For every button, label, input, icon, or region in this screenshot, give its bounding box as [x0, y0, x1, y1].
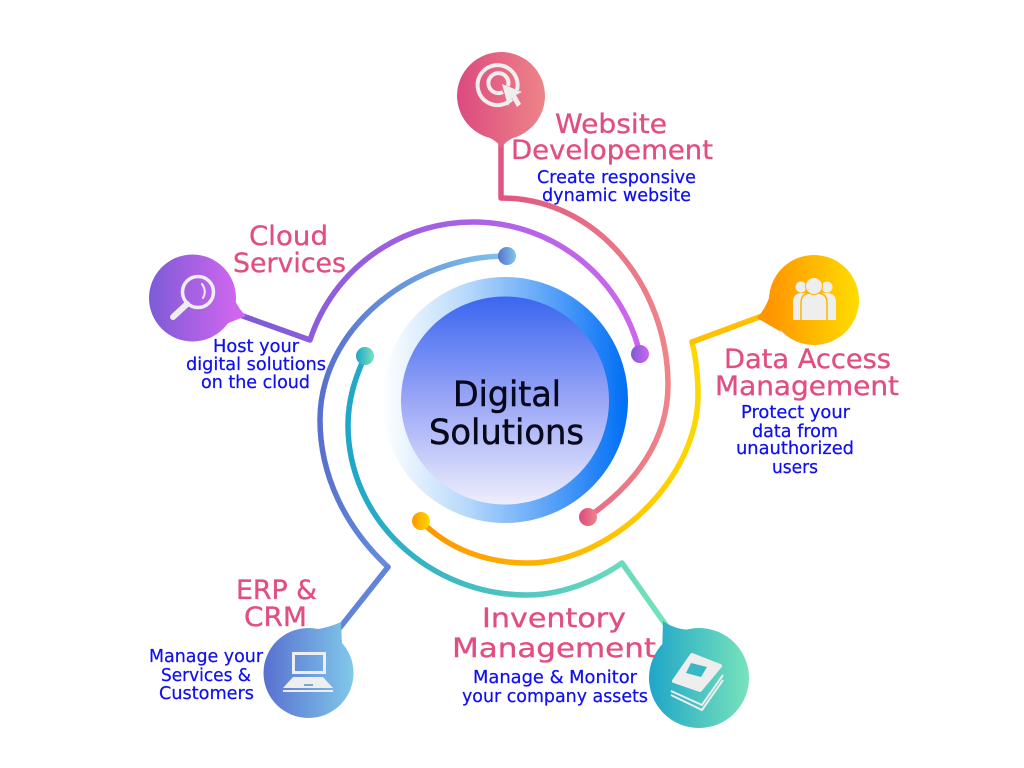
- node: Cloud Services: [149, 254, 246, 342]
- heading: Management: [452, 633, 656, 664]
- spiral connector: ERP & CRM: [320, 247, 516, 630]
- description: Services &: [161, 665, 251, 686]
- description: dynamic website: [542, 185, 691, 206]
- node: Website Development: [457, 52, 545, 148]
- description: Manage & Monitor: [473, 667, 638, 688]
- central hub: Digital Solutions: [382, 277, 628, 523]
- label: Data Access Management: [715, 344, 899, 478]
- icon: laptop: [283, 654, 333, 692]
- node disc with pointer: [649, 628, 749, 728]
- node: Inventory Management: [649, 621, 749, 728]
- label: ERP & CRM: [149, 575, 317, 704]
- description: unauthorized: [736, 438, 854, 459]
- spiral connector: Website Development: [501, 130, 668, 526]
- icon: target with cursor: [478, 65, 522, 107]
- description: your company assets: [462, 686, 648, 707]
- heading: ERP &: [236, 575, 317, 606]
- label: Inventory Management: [452, 603, 656, 707]
- node disc with pointer: [769, 255, 859, 345]
- heading: Management: [715, 371, 899, 402]
- heading: Website: [555, 109, 667, 140]
- hub inner disc: [401, 296, 609, 504]
- hub title: Solutions: [429, 413, 584, 453]
- heading: Data Access: [724, 344, 891, 375]
- description: on the cloud: [201, 372, 310, 393]
- spiral connector: Cloud Services: [240, 222, 649, 363]
- heading: Cloud: [249, 221, 328, 252]
- label: Cloud Services: [186, 221, 346, 393]
- node: Data Access Management: [757, 255, 859, 345]
- node disc with pointer: [457, 52, 545, 148]
- description: digital solutions: [186, 354, 326, 375]
- heading: Inventory: [482, 603, 626, 634]
- label: Website Development: [511, 109, 713, 206]
- node disc with pointer: [264, 628, 354, 718]
- description: data from: [752, 421, 838, 442]
- heading: Services: [233, 248, 346, 279]
- node: ERP & CRM: [264, 622, 354, 718]
- description: Protect your: [741, 402, 851, 423]
- icon: stack of books: [671, 655, 723, 710]
- hub title: Digital: [453, 375, 561, 415]
- hub outer gradient ring: [382, 277, 628, 523]
- icon: people group: [793, 278, 836, 321]
- spiral connector: Inventory Management: [348, 347, 668, 628]
- description: Customers: [159, 683, 254, 704]
- heading: Developement: [511, 135, 713, 166]
- description: Host your: [213, 336, 300, 357]
- icon: magnifier: [173, 276, 214, 317]
- node disc with pointer: [149, 254, 236, 342]
- heading: CRM: [244, 602, 307, 633]
- description: Manage your: [149, 646, 264, 667]
- spiral connector: Data Access Management: [412, 316, 762, 563]
- description: users: [772, 457, 818, 478]
- description: Create responsive: [537, 167, 696, 188]
